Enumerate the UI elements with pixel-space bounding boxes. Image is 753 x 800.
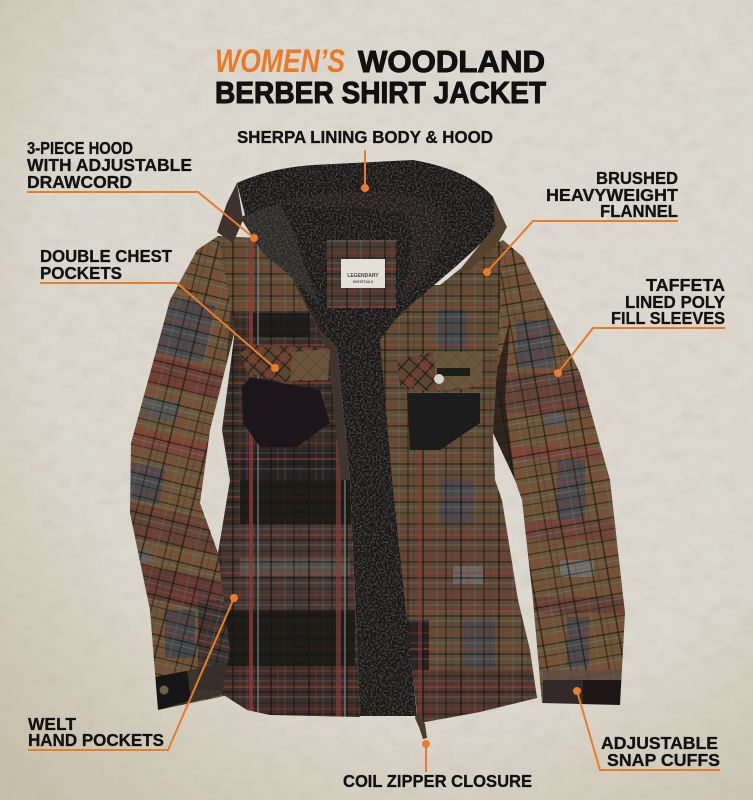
title: WOODLAND: [358, 45, 545, 79]
callout: flannel: [483, 168, 678, 276]
brand label patch: LEGENDARY: [347, 273, 379, 279]
callout: hand pockets: [28, 594, 238, 750]
callout: flannel: HEAVYWEIGHT: [546, 185, 678, 205]
callout: hood drawcord: 3-PIECE HOOD: [27, 138, 133, 158]
callout: chest pockets: [40, 246, 279, 372]
left inner hood fold: [240, 203, 320, 305]
callout: flannel: FLANNEL: [600, 201, 678, 221]
brand label patch: [327, 240, 396, 308]
callout: snap cuffs: [573, 687, 720, 770]
left front panel: [215, 235, 365, 720]
callout: zipper: [343, 740, 532, 791]
left hood plaid edge: [217, 183, 243, 243]
jacket illustration: [130, 160, 625, 739]
callout: sherpa lining: SHERPA LINING BODY & HOOD: [237, 127, 493, 147]
callout: sleeves: LINED POLY: [625, 292, 725, 312]
callout: sherpa lining: [237, 127, 493, 192]
callout: snap cuffs: SNAP CUFFS: [607, 750, 720, 770]
callout: hood drawcord: WITH ADJUSTABLE: [27, 155, 192, 175]
title: [215, 43, 546, 110]
zipper pull: [415, 713, 427, 739]
left pocket: [240, 345, 330, 447]
callout: hand pockets: HAND POCKETS: [28, 730, 164, 750]
callout: hand pockets: WELT: [28, 714, 76, 734]
right sleeve: [490, 235, 630, 710]
title: BERBER SHIRT JACKET: [215, 76, 546, 110]
callout: sleeves: FILL SLEEVES: [611, 308, 725, 328]
callout: snap cuffs: ADJUSTABLE: [601, 733, 718, 753]
callout: hood drawcord: DRAWCORD: [27, 172, 132, 192]
callout: sleeves: [554, 275, 725, 377]
right pocket: [397, 352, 483, 450]
callout: chest pockets: DOUBLE CHEST: [40, 246, 172, 266]
callout: sleeves: TAFFETA: [646, 275, 725, 295]
callout: zipper: COIL ZIPPER CLOSURE: [343, 771, 532, 791]
hood and sherpa lining: [237, 160, 500, 716]
right hood plaid edge: [458, 197, 507, 272]
callout: chest pockets: POCKETS: [40, 263, 122, 283]
hood fold line: [280, 192, 444, 300]
left cuff snap: [160, 686, 168, 694]
title: WOMEN’S: [215, 43, 346, 79]
right front panel: [375, 235, 545, 730]
callout: hood drawcord: [27, 138, 258, 242]
left sleeve: [130, 236, 235, 710]
callout: flannel: BRUSHED: [596, 168, 678, 188]
brand label patch: WHITETAILS: [353, 280, 374, 284]
